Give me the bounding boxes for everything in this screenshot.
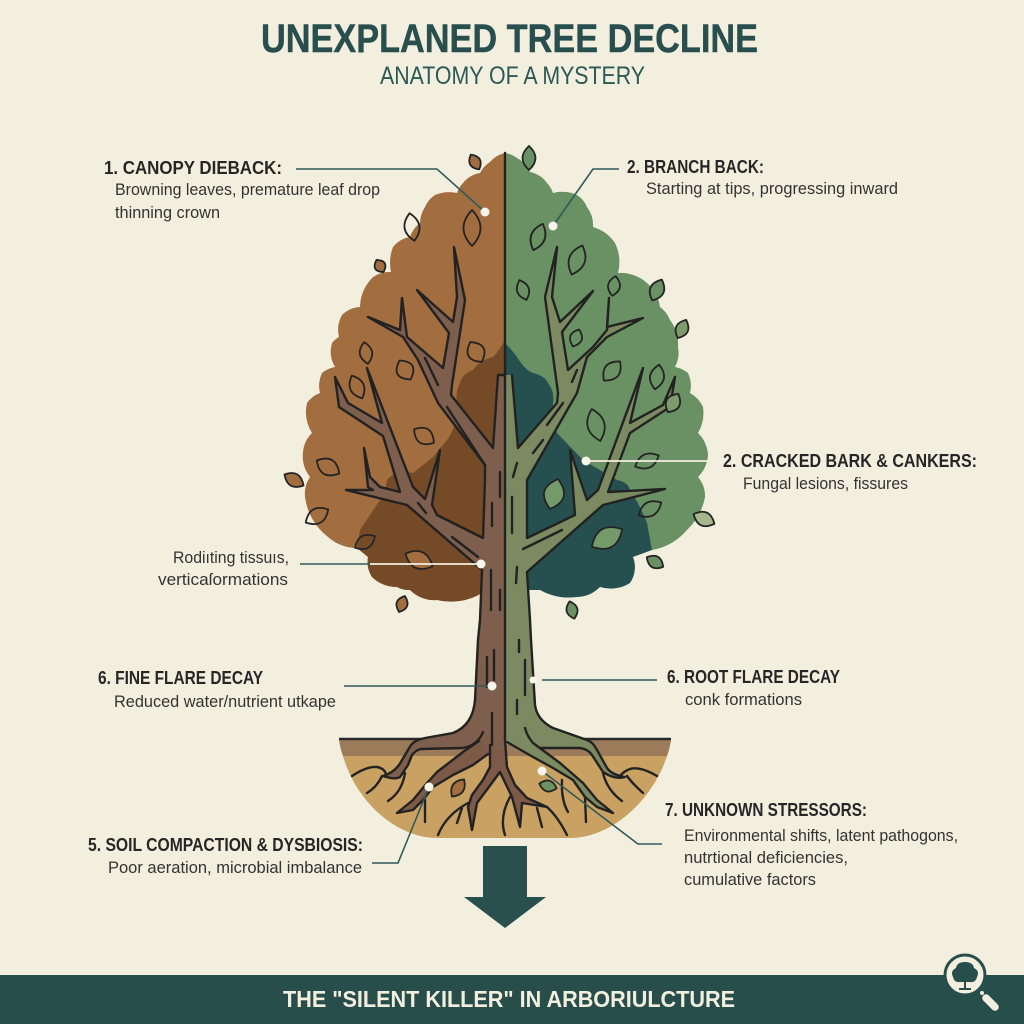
soil: topsoil band <box>339 739 671 756</box>
callout 8: unknown stressors: Environmental shifts, latent pathogons, <box>684 826 958 845</box>
callout 8: unknown stressors: 7. UNKNOWN STRESSORS: <box>665 799 867 820</box>
subtitle: ANATOMY OF A MYSTERY <box>380 62 645 90</box>
leaves: green side <box>514 146 717 620</box>
trunk and branches, green side <box>505 247 675 813</box>
leaf: buried green <box>538 778 558 794</box>
callout 1: canopy dieback: thinning crown <box>115 203 220 222</box>
callout 2: branch back: 2. BRANCH BACK: <box>627 156 764 177</box>
footer banner <box>0 975 1024 1024</box>
callout 4: rotting tissues: Rodiıting tissuıs, <box>173 548 289 567</box>
callout 8: unknown stressors <box>538 766 958 889</box>
callout 7: soil compaction: 5. SOIL COMPACTION & DYSBIOSIS: <box>88 834 363 855</box>
callout 3: cracked bark and cankers: Fungal lesions, fissures <box>743 474 908 493</box>
trunk and branches, brown side <box>335 247 505 778</box>
callout 1: canopy dieback: 1. CANOPY DIEBACK: <box>104 157 282 178</box>
tree: brown dying half with branches and roots <box>335 247 547 830</box>
root: lower left <box>397 735 490 813</box>
outlines, green side <box>507 247 675 813</box>
callout 1: canopy dieback <box>104 157 490 222</box>
callout 3: cracked bark and cankers: 2. CRACKED BARK & CANKERS: <box>723 450 977 471</box>
callout 4: rotting tissues: verticaſormations <box>158 570 288 589</box>
bark cracks, brown side <box>418 358 500 745</box>
footer banner: THE "SILENT KILLER" IN ARBORIULCTURE <box>283 986 735 1012</box>
soil cross-section <box>339 739 671 838</box>
callout 6: root flare decay: 6. ROOT FLARE DECAY <box>667 666 841 687</box>
soil: subsoil bowl <box>339 739 671 838</box>
callout 5: fine flare decay: Reduced water/nutrient utkape <box>114 692 336 711</box>
tree: green healthy half with branches and roots <box>505 247 675 813</box>
callout 1: canopy dieback: Browning leaves, premature leaf drop <box>115 180 380 199</box>
callout 2: branch back <box>548 156 898 230</box>
canopy: healthy green half <box>505 153 708 590</box>
callout 8: unknown stressors: nutrtional deficiencies, <box>684 848 848 867</box>
callout 5: fine flare decay: 6. FINE FLARE DECAY <box>98 667 264 688</box>
centre divide line <box>504 153 506 740</box>
arrow: downward decline <box>464 846 546 928</box>
outlines, brown side <box>335 247 547 830</box>
callout 7: soil compaction: Poor aeration, microbial imbalance <box>108 858 362 877</box>
callout 6: root flare decay: conk formations <box>685 690 802 709</box>
callout 2: branch back: Starting at tips, progressing inward <box>646 179 898 198</box>
canopy: shaded teal interior <box>505 343 652 598</box>
callout 3: cracked bark and cankers <box>582 450 977 493</box>
tree: fine roots <box>352 767 657 835</box>
bark cracks, green side <box>512 370 577 714</box>
leaves: brown side <box>281 152 489 614</box>
root: center trunk root <box>468 740 547 830</box>
callout 4: rotting tissues <box>158 548 486 589</box>
icon: magnifier over tree <box>945 955 995 1007</box>
callout 7: soil compaction <box>88 782 434 877</box>
callout 8: unknown stressors: cumulative factors <box>684 870 816 889</box>
callout 6: root flare decay <box>530 666 841 709</box>
illustration: tree canopy <box>303 153 708 602</box>
soil leaves <box>447 776 558 800</box>
callout 5: fine flare decay <box>98 667 496 711</box>
leaf: buried brown <box>447 776 469 800</box>
canopy: shaded brown interior <box>357 340 505 602</box>
title: UNEXPLANED TREE DECLINE <box>261 17 758 61</box>
canopy: dying brown half <box>303 153 505 602</box>
